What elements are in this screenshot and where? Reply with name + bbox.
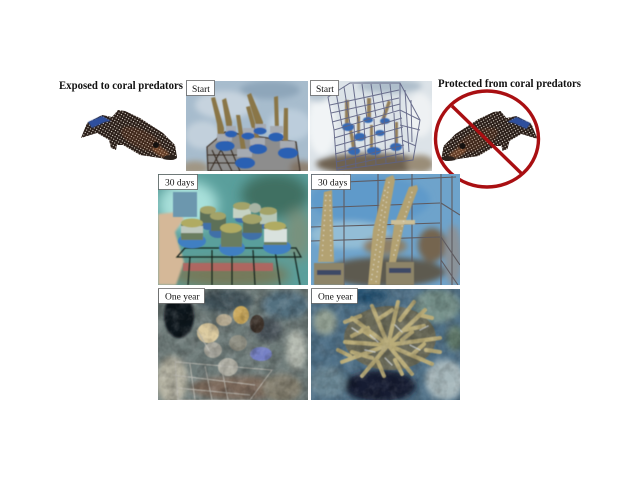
- label: 30 days: 30 days: [318, 178, 348, 188]
- staghorn colony: [338, 302, 440, 376]
- coral rack: [207, 132, 300, 171]
- texture: [158, 289, 308, 400]
- label: start: Start: [316, 85, 334, 95]
- staghorn branches: [314, 175, 418, 285]
- label: start: Start: [192, 85, 210, 95]
- label: 30 days: 30 days: [165, 178, 195, 188]
- icon: pufferfish with prohibition sign: [436, 91, 538, 187]
- label: start: [310, 80, 338, 96]
- photo: one year, exposed: [156, 289, 309, 404]
- label: one year: One year: [165, 292, 200, 302]
- diver hand: [158, 212, 184, 285]
- photo: 30 days, exposed: [158, 173, 312, 289]
- texture: [311, 289, 460, 400]
- photo: 30 days, protected: [310, 174, 462, 287]
- pink bar: [183, 263, 273, 271]
- coral fragments: [342, 98, 402, 155]
- heading: exposed to coral predators: Exposed to coral predators: [59, 80, 183, 92]
- label: 30 days: [312, 174, 350, 190]
- photo: start, exposed: [186, 81, 308, 171]
- coral pots: [178, 202, 291, 256]
- label: one year: [312, 288, 358, 304]
- heading: protected from coral predators: Protected from coral predators: [438, 78, 581, 90]
- coral growth: [197, 306, 272, 376]
- label: one year: One year: [318, 292, 353, 302]
- photo: one year, protected: [310, 288, 465, 402]
- coral rack: [177, 248, 301, 285]
- label: one year: [158, 288, 204, 304]
- label: start: [186, 80, 214, 96]
- icon: pufferfish, exposed: [81, 110, 177, 160]
- photo: start, protected: [310, 81, 432, 171]
- rack: [173, 330, 272, 400]
- wire cage: [328, 83, 420, 170]
- ruler: [173, 192, 197, 217]
- cage wire: [311, 174, 460, 285]
- label: 30 days: [158, 174, 198, 190]
- coral fragments and blue bases: [211, 93, 298, 168]
